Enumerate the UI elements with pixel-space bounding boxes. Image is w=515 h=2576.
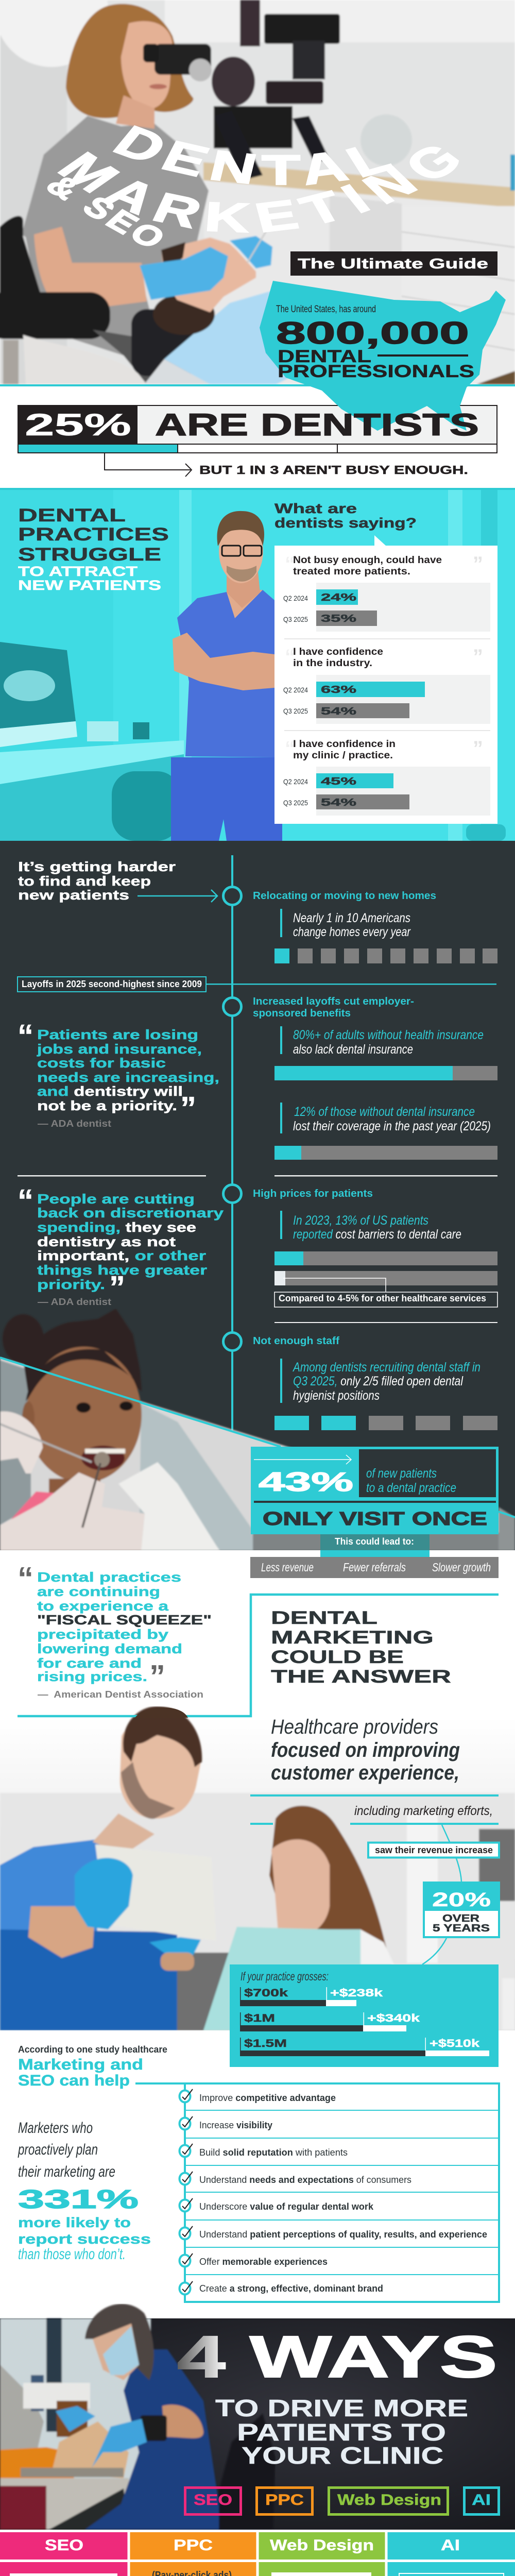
survey question 2: Q2 2024 (283, 686, 308, 694)
callout: layoffs: Layoffs in 2025 second-highest since 2009 (22, 979, 202, 989)
text: healthcare providers: focused on improving (271, 1739, 460, 1761)
survey question 3: “ (285, 737, 295, 760)
heading: harder to find and keep (18, 859, 176, 903)
survey question 2: 63% (321, 684, 356, 696)
gray row: could lead to (250, 1534, 499, 1578)
frame around fiscal squeeze quote (18, 1595, 499, 1716)
survey question 2: ” (473, 646, 483, 668)
quote: fiscal squeeze: are continuing (37, 1584, 160, 1599)
channel tags: Web Design (337, 2492, 441, 2509)
block: high prices (253, 1188, 497, 1307)
heading: harder to find and keep: It’s getting harder (18, 859, 176, 874)
quote: patients losing jobs (18, 1019, 219, 1129)
hero photo: dentist with microscope and patient (0, 0, 515, 384)
item: value of dental work: Underscore value of regular dental work (199, 2201, 374, 2212)
heading: marketing and seo can help: According to one study healthcare (18, 2044, 167, 2055)
callout: 43 percent only visit once: of new patients (366, 1466, 437, 1481)
heading: marketing and seo can help: Marketing and (18, 2056, 143, 2073)
callout: 20 percent over 5 years (423, 1882, 500, 1938)
callout: 43 percent only visit once (251, 1447, 499, 1534)
quote: fiscal squeeze: ” (149, 1659, 165, 1694)
quote: fiscal squeeze (18, 1561, 212, 1700)
block: high prices: In 2023, 13% of US patients (293, 1213, 428, 1228)
callout: 43 percent only visit once: to a dental practice (366, 1481, 456, 1495)
quote: fiscal squeeze: Dental practices (37, 1569, 181, 1585)
column headers: Web Design (270, 2537, 374, 2554)
callout: 43 percent only visit once: ONLY VISIT ONCE (263, 1508, 487, 1529)
callout: 20 percent over 5 years: 20% (432, 1889, 491, 1911)
column backgrounds (0, 2532, 515, 2576)
item: visibility: Increase visibility (199, 2120, 272, 2130)
callout: saw revenue increase: saw their revenue increase (375, 1845, 493, 1855)
callout: 20 percent over 5 years: 5 YEARS (433, 1923, 490, 1934)
quote: fiscal squeeze: for care and (37, 1655, 142, 1671)
quote: cutting discretionary spending: spending, they see (37, 1219, 196, 1235)
quote: cutting discretionary spending: — ADA dentist (38, 1297, 111, 1307)
channel tags (185, 2487, 499, 2514)
item: reputation: Build solid reputation with patients (199, 2147, 348, 2158)
callout: 20 percent over 5 years: OVER (442, 1913, 480, 1924)
survey question 3: 45% (321, 776, 356, 787)
block: relocating: Nearly 1 in 10 Americans (293, 911, 410, 925)
seo description card (10, 2573, 117, 2576)
stat: 331 percent more likely: their marketing are (18, 2163, 115, 2180)
block: layoffs cut benefits: sponsored benefits (253, 1008, 351, 1019)
heading: dental marketing could be the answer: COULD BE (271, 1647, 404, 1667)
quote: cutting discretionary spending: dentistry as not (37, 1234, 176, 1249)
survey question 1: 35% (321, 613, 356, 624)
column headers: PPC (174, 2537, 213, 2554)
channel tags: SEO (194, 2492, 232, 2509)
ten square pictogram (274, 948, 497, 963)
stat: 331 percent more likely: proactively plan (18, 2141, 98, 2158)
quote: cutting discretionary spending: priority. (37, 1277, 105, 1292)
stat: 331 percent more likely (18, 2120, 151, 2263)
quote: cutting discretionary spending: back on discretionary (37, 1205, 224, 1221)
bar 1M (240, 2012, 420, 2031)
survey question 3: ” (473, 737, 483, 760)
gray row: could lead to: Fewer referrals (343, 1561, 406, 1574)
heading: what are dentists saying: dentists saying? (274, 515, 417, 531)
stat: 800,000 dental professionals: 800,000 (276, 316, 469, 350)
item: value of dental work (179, 2198, 374, 2212)
quote: fiscal squeeze: rising prices. (37, 1669, 147, 1684)
block: high prices: High prices for patients (253, 1188, 373, 1199)
quote: patients losing jobs: needs are increasing, (37, 1070, 219, 1085)
text: healthcare providers: customer experience, (271, 1761, 459, 1784)
heading: marketing and seo can help (18, 2044, 167, 2089)
block: not enough staff: Among dentists recruiting dental staff in (292, 1360, 480, 1375)
white background under photo (0, 2030, 515, 2319)
quote: patients losing jobs: jobs and insurance, (37, 1041, 202, 1057)
heading: harder to find and keep: new patients (18, 887, 129, 903)
survey question 1: “ (285, 553, 295, 575)
gray row: could lead to: Slower growth (432, 1561, 491, 1574)
ai dark horse card (399, 2573, 504, 2576)
survey question 1: Q2 2024 (283, 594, 308, 602)
arrow to busy enough (105, 453, 192, 477)
quote: fiscal squeeze: lowering demand (37, 1641, 182, 1656)
column headers: AI (441, 2537, 460, 2554)
survey question 2 (283, 646, 490, 724)
item: memorable experiences: Offer memorable experiences (199, 2257, 328, 2267)
white comparison background (0, 2530, 515, 2576)
block: layoffs cut benefits: Increased layoffs cut employer- (253, 996, 414, 1007)
channel tags: AI (472, 2492, 491, 2509)
callout: 43 percent only visit once: 43% (259, 1467, 353, 1497)
panel: survey bars (274, 535, 497, 824)
subtitle badge: the ultimate guide: The Ultimate Guide (298, 256, 488, 272)
quote: fiscal squeeze: "FISCAL SQUEEZE" (37, 1612, 212, 1628)
heading: 4 ways: YOUR CLINIC (242, 2442, 443, 2469)
quote: fiscal squeeze: to experience a (37, 1598, 169, 1614)
heading: dental marketing could be the answer (271, 1608, 451, 1687)
photo: dentist with tablet and patient (0, 1706, 515, 2030)
heading: dental practices struggle (18, 505, 169, 593)
photo: child at the dentist (0, 1309, 515, 1551)
quote: patients losing jobs: — ADA dentist (38, 1118, 111, 1129)
heading: harder to find and keep: to find and keep (18, 873, 151, 889)
callout: saw revenue increase (368, 1842, 499, 1858)
bar 700k: +$238k (330, 1987, 383, 1999)
callout: layoffs (18, 977, 496, 992)
dentist (171, 511, 282, 841)
quote: fiscal squeeze: precipitated by (37, 1626, 169, 1642)
item: patient perceptions: Understand patient perceptions of quality, results, and experience (199, 2229, 487, 2240)
white panel below hero (0, 384, 515, 490)
quote: cutting discretionary spending (18, 1183, 224, 1307)
stat: 331 percent more likely: more likely to (18, 2215, 131, 2230)
text: healthcare providers (250, 1716, 499, 1818)
quote: patients losing jobs: and dentistry will (37, 1083, 183, 1099)
quote: cutting discretionary spending: “ (18, 1183, 33, 1219)
quote: cutting discretionary spending: People are cutting (37, 1191, 195, 1207)
bar 1M: +$340k (367, 2012, 420, 2024)
survey question 3: 54% (321, 797, 356, 808)
survey question 1 (283, 553, 490, 632)
quote: fiscal squeeze: — American Dentist Association (38, 1689, 203, 1700)
heading: dental practices struggle: STRUGGLE (18, 545, 161, 565)
map of the United States (260, 281, 506, 431)
connector: revenue curve (422, 1825, 461, 1964)
item: needs and expectations: Understand needs and expectations of consumers (199, 2175, 411, 2185)
block: relocating: Relocating or moving to new homes (253, 890, 436, 902)
bar 1.5M: $1.5M (244, 2038, 287, 2049)
heading: 4 ways: 4 WAYS (177, 2324, 497, 2390)
survey question 2: in the industry. (293, 658, 372, 669)
item: memorable experiences (179, 2253, 328, 2267)
stat: 331 percent more likely: Marketers who (18, 2120, 93, 2137)
block: not enough staff (253, 1335, 497, 1430)
survey question 3 (283, 737, 490, 816)
quote: cutting discretionary spending: important, or other (37, 1248, 206, 1263)
survey question 3: Q2 2024 (283, 777, 308, 786)
survey question 2: I have confidence (293, 647, 383, 657)
quote: patients losing jobs: “ (18, 1019, 33, 1054)
subtitle badge: the ultimate guide (290, 251, 497, 276)
heading: what are dentists saying (274, 501, 417, 531)
quote: patients losing jobs: ” (180, 1091, 196, 1126)
panel: 25 percent are dentists: ARE DENTISTS (155, 408, 479, 442)
item: competitive advantage (179, 2089, 336, 2103)
heading: dental marketing could be the answer: MARKETING (271, 1628, 434, 1648)
bar 1.5M (240, 2038, 489, 2056)
timeline spine (224, 855, 241, 1431)
heading: dental practices struggle: TO ATTRACT (18, 564, 138, 579)
stat: 800,000 dental professionals (276, 304, 474, 381)
dark banner: 4 ways photo (0, 2304, 515, 2530)
quote: patients losing jobs: Patients are losing (37, 1027, 198, 1042)
bar 700k (240, 1987, 383, 2006)
channel tags: PPC (265, 2492, 304, 2509)
heading: dental marketing could be the answer: DENTAL (271, 1608, 377, 1628)
survey question 1: Not busy enough, could have (293, 555, 442, 566)
dark section background (0, 841, 515, 1552)
heading: 4 ways (177, 2324, 497, 2469)
heading: dental practices struggle: NEW PATIENTS (18, 578, 161, 593)
quote: patients losing jobs: not be a priority. (37, 1098, 177, 1113)
heading: dental marketing could be the answer: THE ANSWER (271, 1667, 451, 1687)
title: dental marketing and seo warped: DENTAL (112, 125, 392, 185)
text: healthcare providers: including marketing efforts, (354, 1804, 493, 1818)
item: reputation (179, 2144, 348, 2158)
heading: dental practices struggle: DENTAL (18, 505, 126, 526)
item: dominant brand: Create a strong, effective, dominant brand (199, 2283, 383, 2294)
block: not enough staff: Q3 2025, only 2/5 filled open dental (293, 1374, 464, 1388)
block: not enough staff: Not enough staff (253, 1335, 339, 1347)
block: layoffs cut benefits: 80%+ of adults without health insurance (293, 1028, 484, 1042)
panel: 25 percent are dentists: 25% (25, 408, 131, 442)
block: high prices: Compared to 4-5% for other healthcare services (279, 1293, 486, 1303)
column headers: SEO (45, 2537, 83, 2554)
survey question 1: ” (473, 553, 483, 575)
gray row: could lead to: This could lead to: (335, 1536, 414, 1547)
survey question 3: I have confidence in (293, 739, 396, 750)
survey question 2: 54% (321, 706, 356, 717)
panel: revenue gains chart (230, 1964, 499, 2067)
block: high prices: reported cost barriers to dental care (293, 1227, 461, 1242)
quote: fiscal squeeze: “ (18, 1561, 33, 1597)
bar 700k: $700k (244, 1987, 288, 1999)
block: not enough staff: hygienist positions (293, 1388, 380, 1403)
section photo: cyan dental office with dentist (0, 488, 515, 841)
title: dental marketing and seo warped: & SEO (47, 177, 163, 246)
panel: 25 percent are dentists (18, 281, 506, 453)
stat: 331 percent more likely: than those who don’t. (18, 2246, 126, 2263)
stat: 331 percent more likely: report success (18, 2231, 151, 2247)
item: visibility (179, 2116, 272, 2130)
text: but 1 in 3: BUT 1 IN 3 AREN'T BUSY ENOUGH. (199, 463, 468, 477)
quote: patients losing jobs: costs for basic (37, 1055, 166, 1071)
heading: what are dentists saying: What are (274, 501, 357, 516)
survey question 3: Q3 2025 (283, 799, 308, 807)
title: dental marketing and seo warped: MARKETING (57, 146, 459, 233)
heading: 4 ways: TO DRIVE MORE (215, 2395, 468, 2421)
block: relocating (253, 890, 497, 963)
survey question 1: 24% (321, 592, 356, 603)
block: layoffs cut benefits (253, 996, 497, 1160)
block: relocating: change homes every year (293, 925, 411, 939)
survey question 1: Q3 2025 (283, 615, 308, 623)
survey question 2: Q3 2025 (283, 707, 308, 715)
block: layoffs cut benefits: 12% of those without dental insurance (294, 1105, 475, 1119)
white panel: fiscal squeeze and marketing answer (0, 1550, 515, 1716)
heading: dental practices struggle: PRACTICES (18, 524, 169, 545)
stat: 800,000 dental professionals: DENTAL (278, 347, 371, 366)
stat: 331 percent more likely: 331% (18, 2184, 139, 2214)
quote: cutting discretionary spending: ” (109, 1270, 125, 1306)
survey question 1: treated more patients. (293, 566, 410, 577)
stat: 800,000 dental professionals: The United States, has around (276, 304, 376, 315)
arrow: to relocating (138, 890, 217, 902)
benefits checklist (135, 2083, 499, 2302)
heading: 4 ways: PATIENTS TO (237, 2419, 446, 2446)
survey question 2: “ (285, 646, 295, 668)
man's hair over frame (135, 1707, 188, 1718)
text: healthcare providers: Healthcare providers (271, 1716, 438, 1738)
heading: marketing and seo can help: SEO can help (18, 2072, 130, 2089)
item: competitive advantage: Improve competitive advantage (199, 2093, 336, 2103)
block: layoffs cut benefits: also lack dental insurance (293, 1042, 413, 1057)
bar 1M: $1M (244, 2012, 275, 2024)
panel: revenue gains chart: If your practice grosses: (241, 1970, 329, 1983)
bar 1.5M: +$510k (430, 2038, 479, 2049)
gray row: could lead to: Less revenue (261, 1561, 314, 1574)
icon: web design monitor (271, 2572, 371, 2576)
survey question 3: my clinic / practice. (293, 750, 393, 761)
stat: 800,000 dental professionals: PROFESSIONALS (278, 362, 474, 381)
quote: cutting discretionary spending: things have greater (37, 1262, 207, 1278)
column headers (45, 2537, 460, 2554)
